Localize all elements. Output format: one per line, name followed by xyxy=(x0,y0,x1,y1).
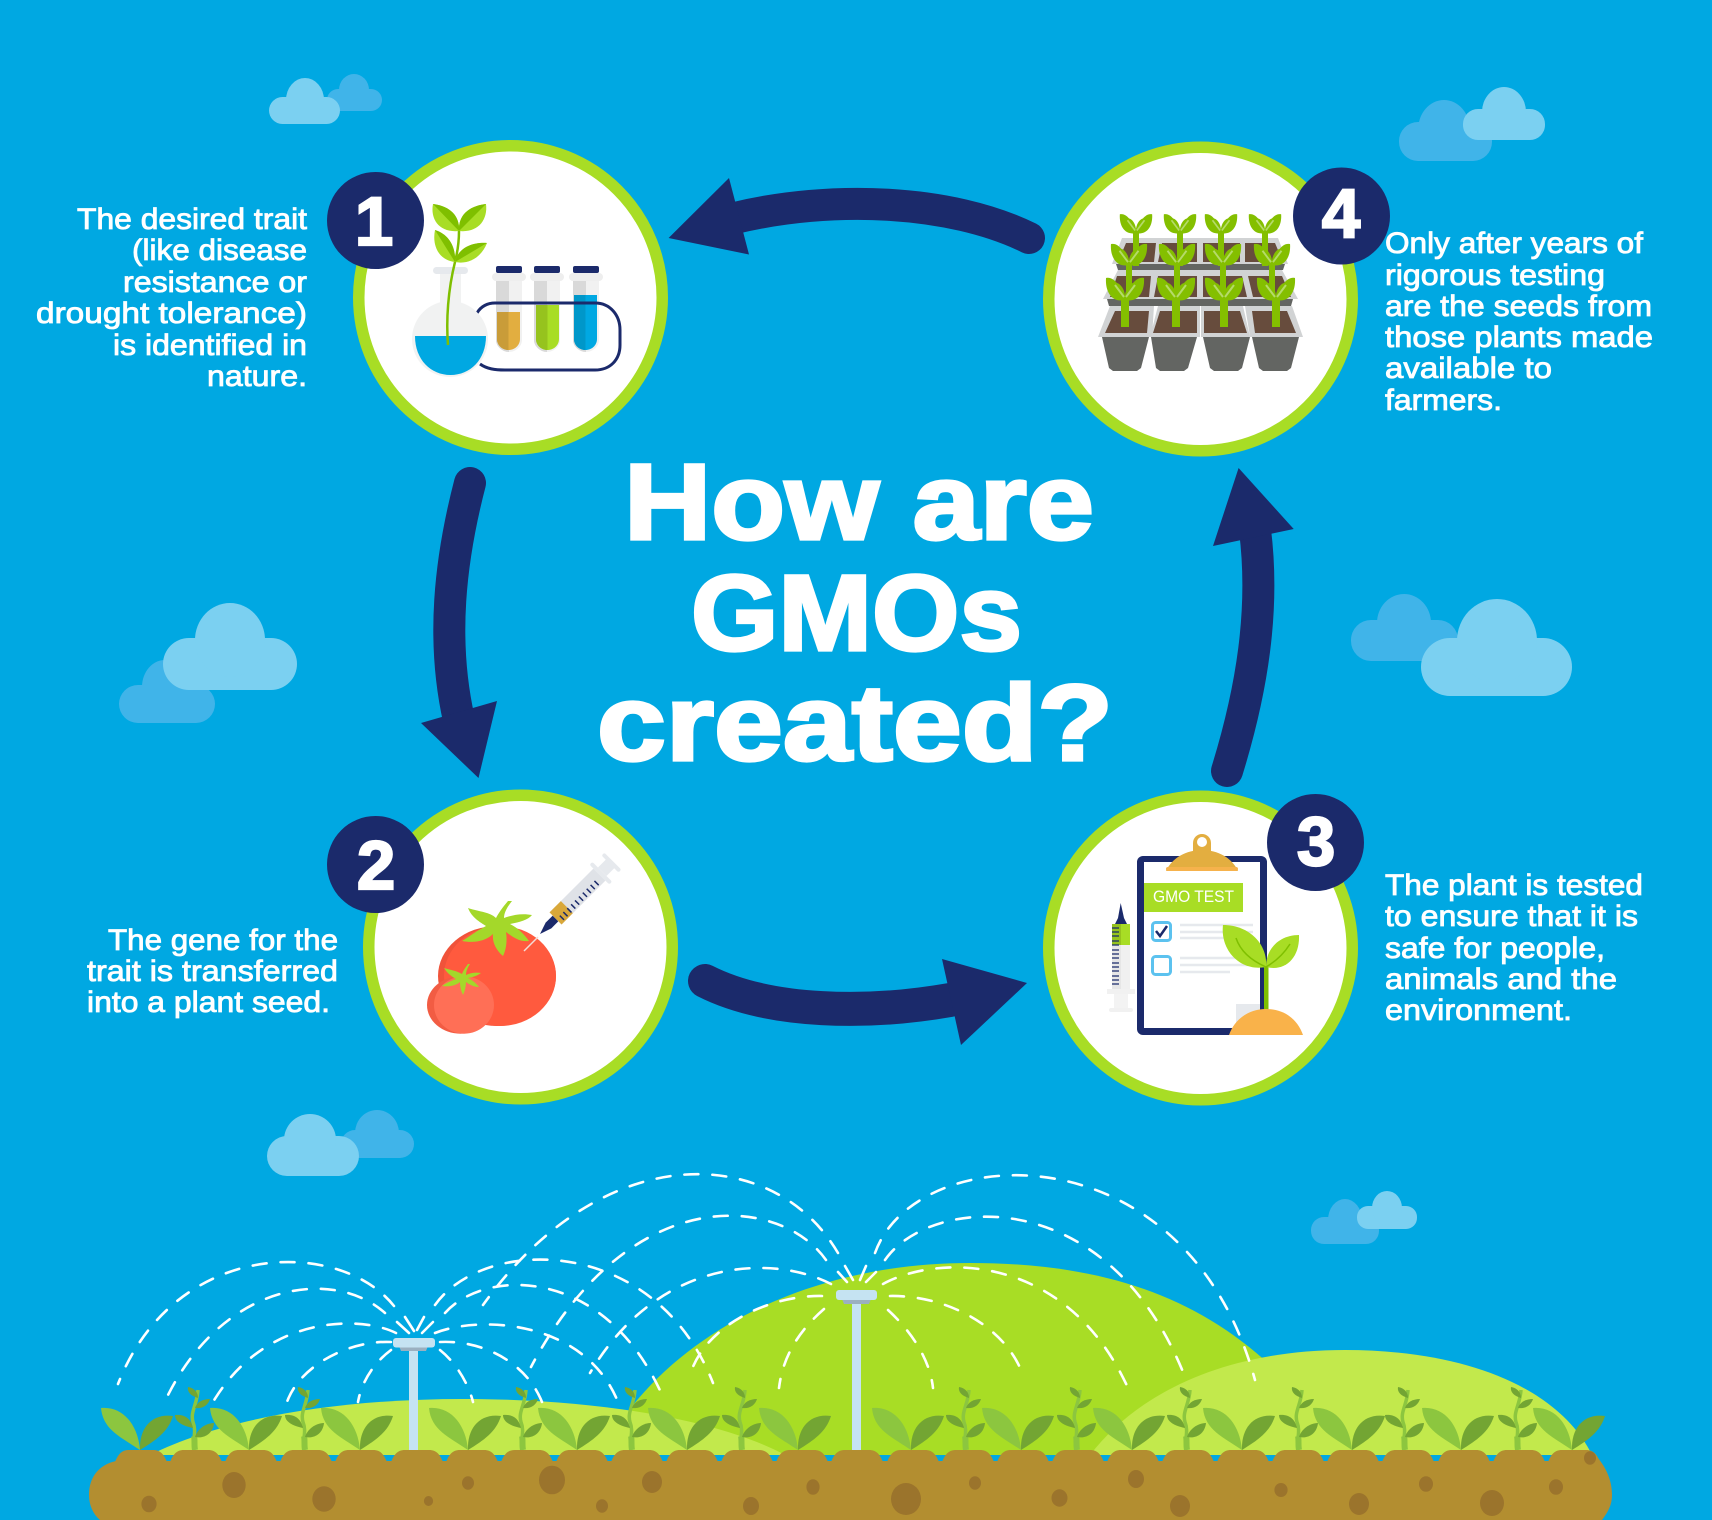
text: step 3 description xyxy=(1385,869,1643,1027)
hill: large centre xyxy=(600,1263,1300,1455)
crop row: vine seedlings xyxy=(175,1387,1537,1450)
cloud: lower right xyxy=(1311,1191,1417,1244)
text: step 2 description xyxy=(87,924,338,1019)
panel: step 1 circle xyxy=(327,146,662,449)
badge: number 2 xyxy=(327,816,424,913)
icon: GMO test clipboard xyxy=(1137,834,1267,1035)
sprinkler: right xyxy=(836,1290,877,1452)
arrow: step 4 to step 1 xyxy=(669,178,1029,254)
icon: flask with plant xyxy=(412,204,488,377)
text: step 2 description: The gene for the xyxy=(108,924,338,957)
text: step 3 description: to ensure that it is xyxy=(1385,900,1638,933)
icon: vertical syringe xyxy=(1107,903,1135,1012)
hill: right light xyxy=(1090,1350,1592,1455)
text: step 3 description: The plant is tested xyxy=(1385,869,1643,902)
icon: seedling trays xyxy=(1098,214,1303,371)
text: step 1 description: nature. xyxy=(207,360,307,393)
hill: left light xyxy=(150,1399,785,1455)
cloud: middle left xyxy=(119,603,297,723)
title: GMOs xyxy=(691,552,1022,673)
sprinkler: left xyxy=(393,1338,435,1452)
icon: large tomato xyxy=(438,901,556,1026)
text: step 1 description: The desired trait xyxy=(77,203,308,236)
crop row: leafy plants xyxy=(101,1408,1605,1450)
badge: number 3: 3 xyxy=(1297,803,1335,880)
text: step 1 description: resistance or xyxy=(123,266,307,299)
icon: test tubes xyxy=(477,266,620,370)
panel: step 3 circle xyxy=(1049,794,1364,1100)
panel: step 4 circle xyxy=(1049,147,1390,451)
text: step 4 description: farmers. xyxy=(1385,384,1502,417)
badge: number 4 xyxy=(1293,168,1390,264)
water spray: right sprinkler xyxy=(483,1174,1255,1388)
icon: syringe into tomato xyxy=(524,851,623,951)
arrow: step 2 to step 3 xyxy=(705,959,1027,1045)
text: step 4 description: those plants made xyxy=(1385,321,1653,354)
badge: number 3 xyxy=(1267,794,1364,891)
panel: step 2 circle xyxy=(327,795,672,1099)
text: step 1 description xyxy=(36,203,308,393)
badge: number 1 xyxy=(327,172,424,269)
title xyxy=(597,441,1113,783)
icon: sprout on soil mound xyxy=(1223,925,1303,1035)
text: step 4 description xyxy=(1385,227,1653,417)
title: How are xyxy=(624,441,1094,562)
badge: number 4: 4 xyxy=(1322,175,1360,252)
text: step 1 description: is identified in xyxy=(113,329,307,362)
cloud: lower left xyxy=(267,1110,414,1176)
soil ground xyxy=(89,1450,1612,1520)
text: step 4 description: are the seeds from xyxy=(1385,290,1652,323)
cloud: top right xyxy=(1399,87,1545,161)
cloud: middle right xyxy=(1351,594,1572,696)
water spray: left sprinkler xyxy=(118,1260,713,1402)
text: step 3 description: environment. xyxy=(1385,994,1572,1027)
icon: GMO test clipboard: GMO TEST xyxy=(1153,888,1234,906)
title: created? xyxy=(597,662,1113,783)
text: step 4 description: available to xyxy=(1385,352,1552,385)
arrow: step 1 to step 2 xyxy=(421,483,497,778)
badge: number 2: 2 xyxy=(357,827,395,904)
icon: small tomato xyxy=(427,964,494,1034)
text: step 3 description: safe for people, xyxy=(1385,932,1605,965)
text: step 1 description: (like disease xyxy=(132,234,307,267)
text: step 1 description: drought tolerance) xyxy=(36,297,307,330)
badge: number 1: 1 xyxy=(355,183,393,260)
text: step 2 description: trait is transferred xyxy=(87,955,338,988)
arrow: step 3 to step 4 xyxy=(1213,468,1294,771)
text: step 3 description: animals and the xyxy=(1385,963,1617,996)
text: step 4 description: rigorous testing xyxy=(1385,259,1605,292)
cloud: top left xyxy=(269,74,382,124)
text: step 2 description: into a plant seed. xyxy=(87,986,330,1019)
text: step 4 description: Only after years of xyxy=(1385,227,1644,260)
